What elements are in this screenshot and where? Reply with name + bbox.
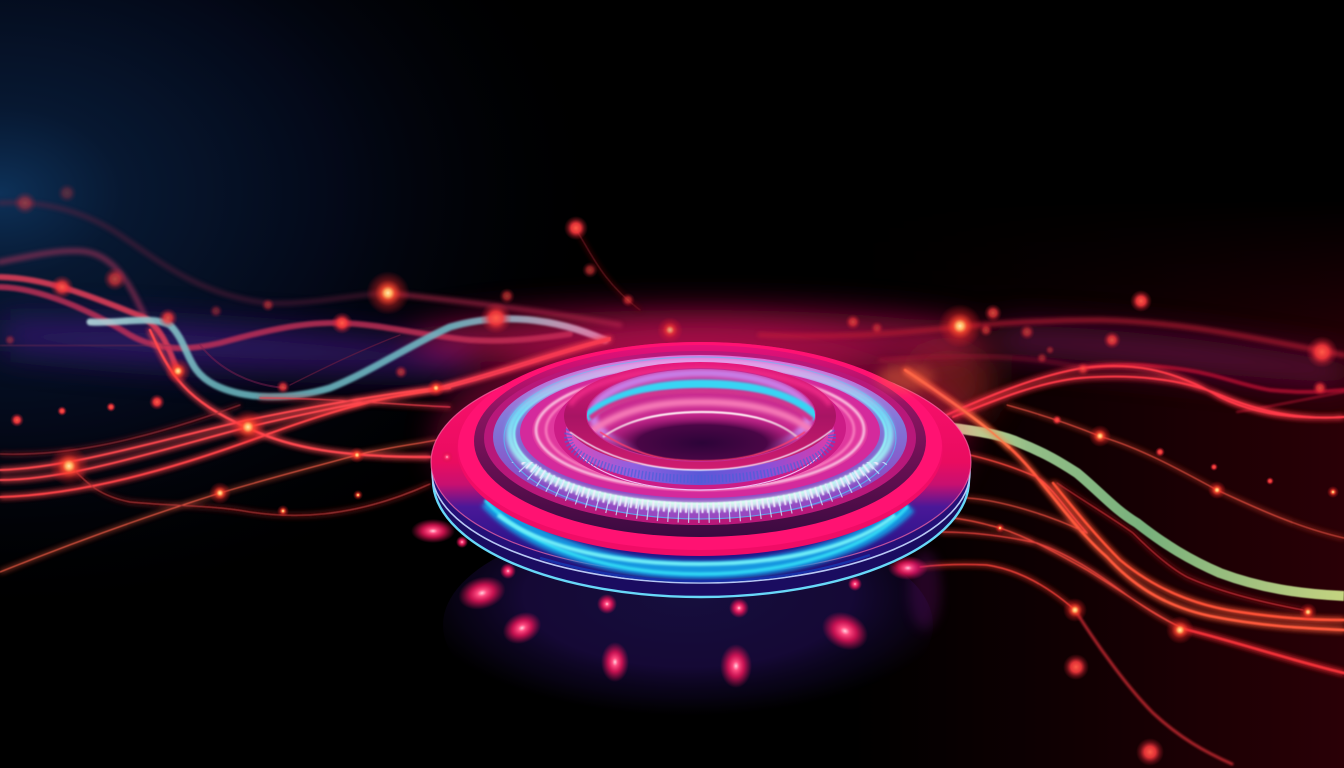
comb ticks: [512, 462, 888, 523]
ring device: [431, 328, 971, 597]
right out-of-focus strands: [760, 320, 1344, 764]
violet middle disk: [493, 355, 907, 519]
glowing nodes: [4, 183, 1339, 766]
right bright strands: [905, 366, 1344, 673]
soft glow behind ring: [435, 328, 965, 552]
cyan glowing band: [485, 500, 908, 581]
left out-of-focus strands: [0, 203, 620, 388]
green ribbon: [953, 428, 1344, 596]
pink top disk: [457, 342, 943, 556]
strand over ribbon: [905, 370, 1010, 448]
plate highlights: [441, 364, 933, 463]
reflection under the ring: [411, 517, 941, 733]
teal ribbon: [90, 319, 605, 397]
hole with glowing inner arcs: [586, 368, 816, 462]
left bright strands: [0, 228, 640, 572]
reflected lights: [411, 519, 941, 688]
inner raised ring: [564, 362, 836, 490]
purple haze band: [0, 310, 1344, 425]
lower glass plate: [431, 350, 971, 597]
